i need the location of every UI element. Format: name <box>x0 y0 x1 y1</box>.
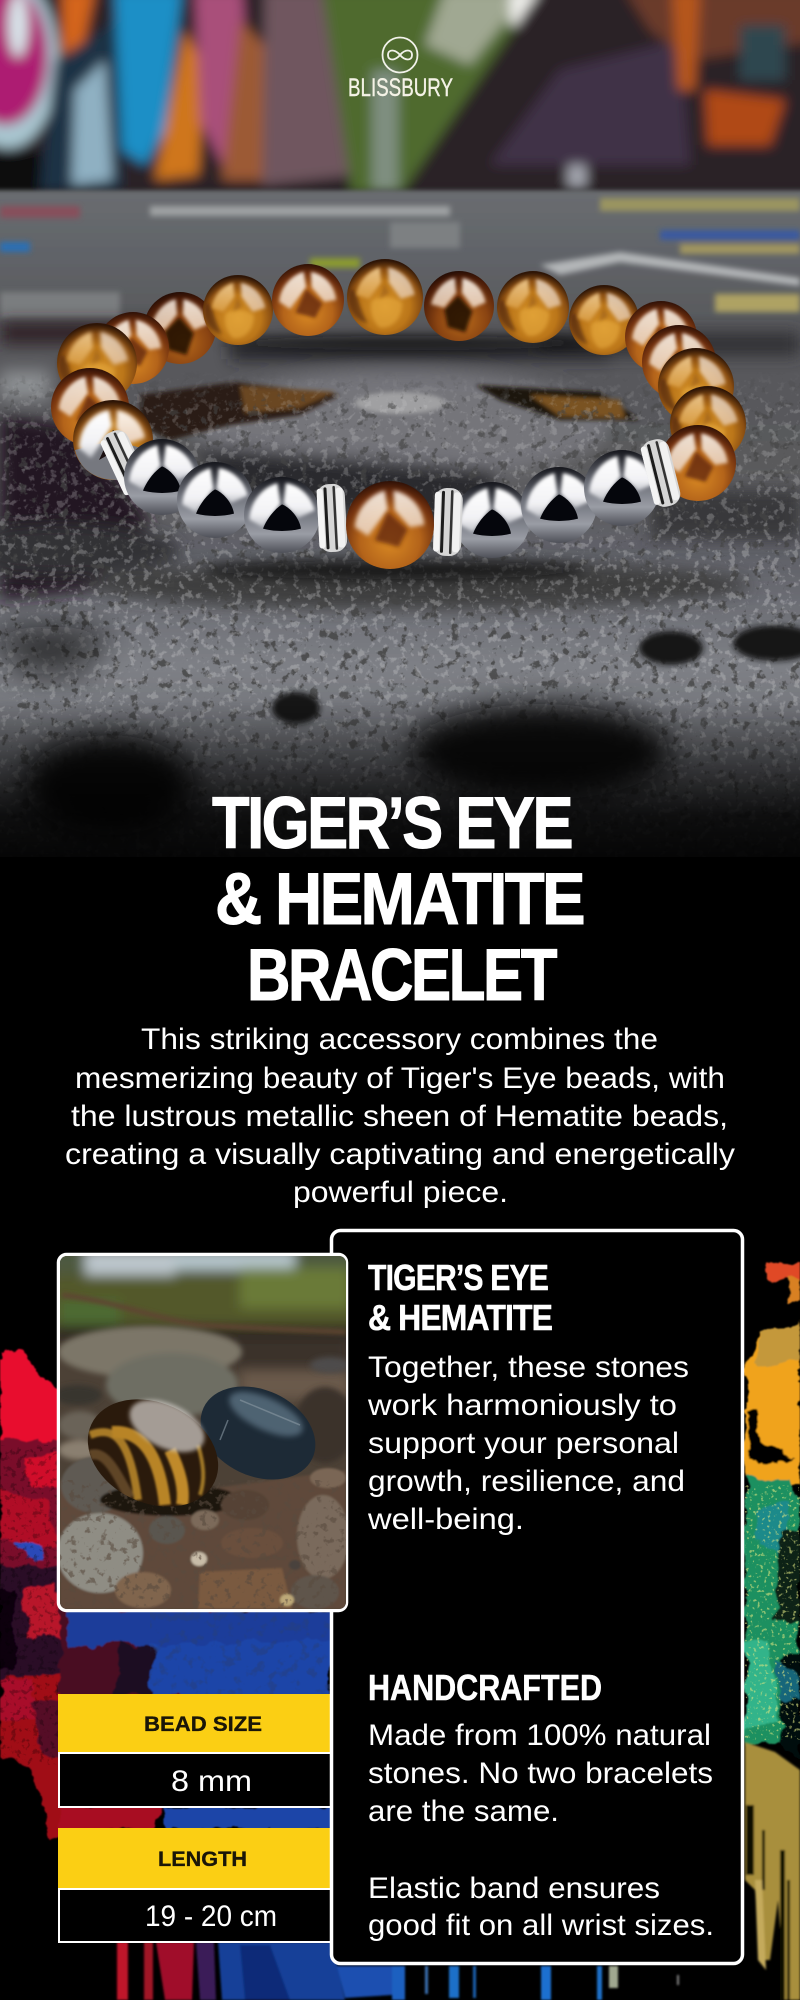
tiger's eye stone <box>88 1398 218 1506</box>
paint splash: right <box>745 1262 800 1760</box>
spec table: length: 19 - 20 cm <box>145 1900 277 1933</box>
photo background: moss and sky <box>60 1256 346 1609</box>
spec table: bead size: BEAD SIZE <box>144 1713 262 1736</box>
card text: handcrafted: Elastic band ensures <box>368 1872 660 1905</box>
puddles <box>140 382 640 440</box>
bracelet <box>51 259 746 579</box>
fade to black <box>0 700 800 860</box>
paint grain: dark <box>0 1445 58 1765</box>
intro paragraph: the lustrous metallic sheen of Hematite beads, <box>71 1100 728 1133</box>
card heading: stones: & HEMATITE <box>368 1297 552 1338</box>
card text: stones: work harmoniously to <box>367 1389 677 1422</box>
card text: stones: well-being. <box>367 1503 524 1536</box>
intro paragraph <box>65 1023 735 1209</box>
intro paragraph: creating a visually captivating and energetically <box>65 1138 735 1171</box>
length value <box>59 1889 331 1942</box>
spec table: length: LENGTH <box>158 1848 247 1871</box>
soft shadows on asphalt <box>0 626 670 835</box>
title: TIGER’S EYE <box>212 783 571 864</box>
twig <box>62 1295 346 1332</box>
card text: handcrafted: stones. No two bracelets <box>368 1757 713 1790</box>
bracelet shadow <box>205 336 600 579</box>
card text: handcrafted: good fit on all wrist sizes. <box>368 1909 714 1942</box>
dark blotches on asphalt <box>272 625 800 724</box>
card text: stones <box>367 1351 689 1536</box>
brand logo <box>348 38 453 102</box>
ground grit <box>60 1480 346 1609</box>
panel: description card <box>332 1230 742 1964</box>
paint grain: green <box>745 1485 800 1740</box>
painted road markings <box>0 198 800 318</box>
spec table: bead size <box>58 1694 331 1807</box>
paint drips: bottom <box>117 1942 679 2000</box>
length label <box>58 1828 330 1888</box>
dark wet patches <box>0 322 800 609</box>
asphalt ground <box>0 190 800 870</box>
foreground ground and rocks <box>57 1457 349 1609</box>
blue hematite stone <box>200 1386 316 1480</box>
card text: handcrafted: are the same. <box>368 1795 559 1828</box>
card text: handcrafted: Made from 100% natural <box>368 1719 711 1752</box>
spec table: length <box>58 1828 331 1942</box>
card text: stones: Together, these stones <box>368 1351 689 1384</box>
bead size label <box>58 1694 330 1752</box>
intro paragraph: powerful piece. <box>293 1176 508 1209</box>
logo wordmark: BLISSBURY <box>348 74 453 102</box>
card heading: stones <box>368 1257 552 1338</box>
paint grain: blue <box>150 1612 330 1694</box>
hero photo: bracelet on wet asphalt <box>0 0 800 870</box>
title <box>212 783 583 1016</box>
blurred rear rocks <box>54 1326 355 1463</box>
bead size value <box>59 1753 331 1807</box>
icon: infinity in circle <box>382 38 418 72</box>
paint drips: right <box>745 1742 800 2000</box>
spec table: bead size: 8 mm <box>171 1765 252 1798</box>
photo: tumbled stones <box>50 1250 360 1610</box>
card heading: handcrafted: HANDCRAFTED <box>368 1667 602 1708</box>
card text: handcrafted <box>368 1719 714 1942</box>
title: & HEMATITE <box>215 859 583 940</box>
card text: stones: growth, resilience, and <box>368 1465 685 1498</box>
card heading: stones: TIGER’S EYE <box>368 1257 548 1298</box>
graffiti walls background <box>0 0 800 195</box>
title: BRACELET <box>247 935 557 1016</box>
paint splash: left <box>0 1350 335 1838</box>
intro paragraph: This striking accessory combines the <box>141 1023 658 1056</box>
asphalt grain <box>0 378 800 796</box>
card text: stones: support your personal <box>368 1427 679 1460</box>
intro paragraph: mesmerizing beauty of Tiger's Eye beads, with <box>75 1062 725 1095</box>
